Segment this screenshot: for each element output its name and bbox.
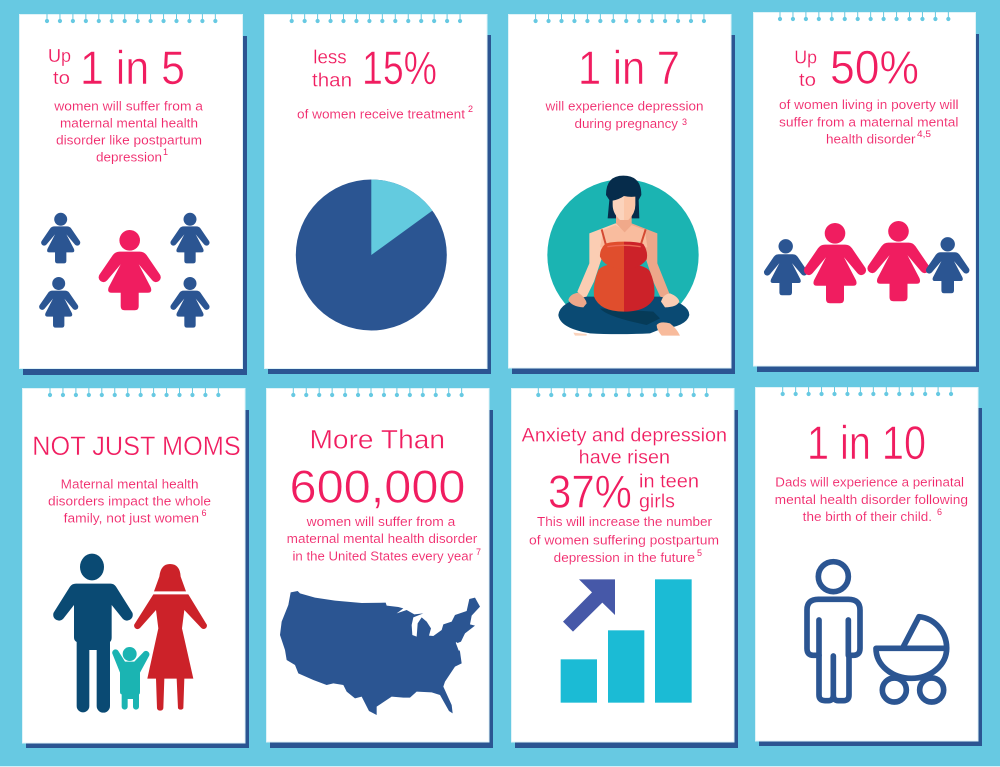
text block: dads perinatal disorder: the birth of their child. xyxy=(803,509,932,524)
text block: depression during pregnancy: during pregnancy xyxy=(574,116,679,131)
text block: impact the whole family: disorders impact the whole xyxy=(48,493,211,508)
text block: impact the whole family: Maternal mental health xyxy=(61,476,199,491)
text block: women living in poverty: suffer from a maternal mental xyxy=(779,114,959,130)
text block: women living in poverty: 4,5 xyxy=(917,129,931,139)
heading: 1 in 10: 1 in 10 xyxy=(807,416,926,469)
panel: up to 50% xyxy=(754,12,979,372)
panel: 37% in teen girls xyxy=(512,388,738,748)
text block: depression during pregnancy xyxy=(544,99,704,131)
heading: less than 15%: 15% xyxy=(362,41,437,94)
panel: 1 in 10 dads xyxy=(756,387,982,746)
panel: 1 in 5 women xyxy=(20,14,247,375)
panel: not just moms xyxy=(22,388,249,748)
icon: pregnant woman meditating xyxy=(547,176,699,336)
text block: women will suffer: disorder like postpartum xyxy=(56,133,202,148)
text block: women will suffer: depression xyxy=(96,150,162,164)
text block: postpartum depression in the future xyxy=(529,514,719,565)
heading: anxiety and depression have risen: have risen xyxy=(579,447,670,468)
heading: less than 15% xyxy=(312,41,437,94)
heading: up to 1 in 5: Up xyxy=(48,46,71,66)
heading: less than 15%: than xyxy=(312,71,352,92)
text block: women in the United States: maternal mental health disorder xyxy=(287,531,478,546)
text block: dads perinatal disorder: mental health disorder following xyxy=(775,492,968,507)
text block: women in the United States: 7 xyxy=(476,547,481,557)
text block: women will suffer: maternal mental health xyxy=(60,116,198,131)
text block: women will suffer: women will suffer from a xyxy=(53,99,204,114)
text block: women in the United States xyxy=(287,514,481,563)
text block: depression during pregnancy: will experience depression xyxy=(544,99,704,114)
text block: impact the whole family: family, not just women xyxy=(64,511,199,526)
heading: up to 1 in 5: 1 in 5 xyxy=(80,41,185,94)
heading: not just moms: NOT JUST MOMS xyxy=(32,431,241,461)
text block: women in the United States: in the United States every year xyxy=(292,548,474,563)
heading: anxiety and depression have risen xyxy=(522,426,727,518)
pie chart: 15 percent xyxy=(296,179,447,330)
text block: receive treatment: 2 xyxy=(468,104,473,114)
text block: postpartum depression in the future: This will increase the number xyxy=(537,514,713,529)
panel: 1 in 7 xyxy=(508,14,735,374)
heading: up to 50% xyxy=(794,40,919,93)
map: United States xyxy=(280,591,480,715)
heading: anxiety and depression have risen: girls xyxy=(639,491,675,512)
heading: up to 50%: 50% xyxy=(830,40,919,93)
heading: up to 50%: to xyxy=(799,70,816,90)
text block: women living in poverty: health disorder xyxy=(826,131,916,146)
text block: postpartum depression in the future: of women suffering postpartum xyxy=(529,533,719,548)
heading: anxiety and depression have risen: Anxiety and depression xyxy=(522,426,727,447)
heading: more than 600,000: 600,000 xyxy=(290,461,466,513)
panel: less than 15% xyxy=(264,14,491,374)
panel: more than 600,000 xyxy=(266,388,493,748)
text block: impact the whole family: 6 xyxy=(202,508,207,518)
heading: up to 1 in 5: to xyxy=(53,68,70,88)
text block: women will suffer: 1 xyxy=(163,147,168,157)
text block: impact the whole family xyxy=(48,476,211,526)
heading: up to 50%: Up xyxy=(794,47,817,67)
icon: family silhouette xyxy=(53,554,207,713)
icon: dad with stroller xyxy=(807,562,947,702)
text block: women will suffer xyxy=(53,99,204,164)
text block: depression during pregnancy: 3 xyxy=(682,117,687,127)
heading: more than 600,000: More Than xyxy=(310,424,445,454)
text block: women living in poverty xyxy=(779,97,959,146)
text block: postpartum depression in the future: depression in the future xyxy=(554,550,695,565)
heading: less than 15%: less xyxy=(313,47,347,68)
icon: women group, one in five highlighted xyxy=(39,213,210,328)
text block: receive treatment: of women receive treatment xyxy=(297,106,465,121)
text block: women living in poverty: of women living in poverty will xyxy=(779,97,959,112)
chart: rising bars with arrow xyxy=(561,579,692,703)
text block: postpartum depression in the future: 5 xyxy=(697,548,702,558)
text block: dads perinatal disorder: Dads will experience a perinatal xyxy=(775,475,964,490)
text block: dads perinatal disorder xyxy=(775,475,968,524)
heading: anxiety and depression have risen: 37% xyxy=(548,466,632,518)
heading: more than 600,000 xyxy=(290,424,466,513)
heading: anxiety and depression have risen: in teen xyxy=(639,472,699,493)
heading: 1 in 7: 1 in 7 xyxy=(578,41,680,94)
text block: women in the United States: women will suffer from a xyxy=(306,514,456,529)
icon: women group xyxy=(764,221,969,303)
text block: dads perinatal disorder: 6 xyxy=(937,507,942,517)
